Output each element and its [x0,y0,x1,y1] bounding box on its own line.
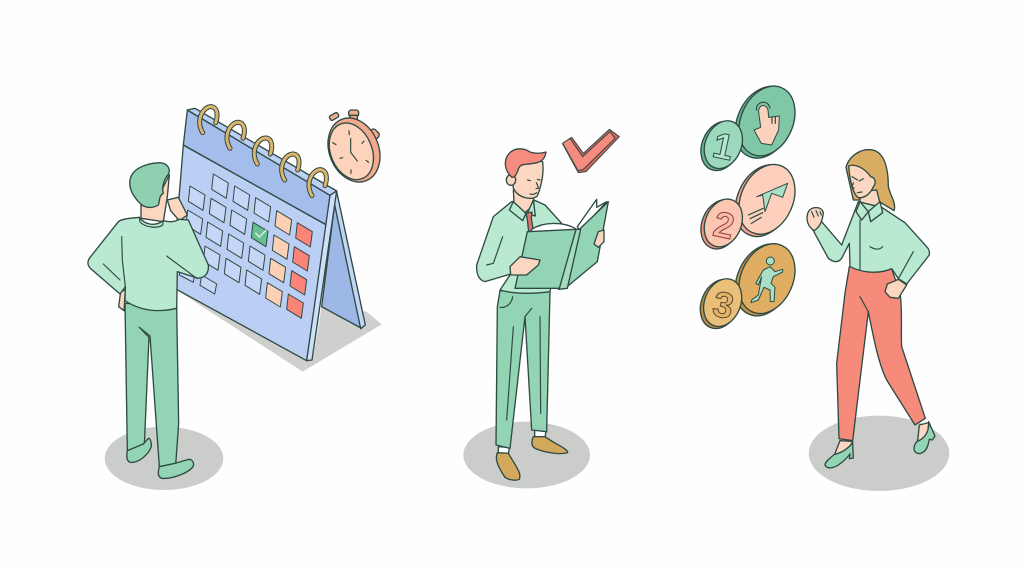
hands [510,257,540,275]
shoes [825,443,853,468]
shirt and arms [813,202,929,284]
sweater [88,217,208,311]
shirt and arm [477,199,562,293]
collar [856,202,883,222]
collar [509,200,535,221]
step 3 coins [693,235,806,334]
man seen from behind [88,163,208,478]
hand at chin [167,197,187,221]
walking woman [807,150,935,468]
desk calendar [172,107,365,361]
socks [498,430,546,454]
small coin number: 2 [710,203,738,247]
step 1 coins [694,77,806,176]
tie [526,212,533,232]
step 2 coins [694,156,806,255]
large coin with paper plane [724,156,806,246]
large coin with pointing hand [724,77,806,167]
open book [515,199,608,289]
neck [860,190,880,212]
hand on hip [119,290,125,311]
figure: man studying a calendar [88,107,389,490]
icon: stopwatch [319,110,389,190]
icon: red check mark [563,129,619,173]
man floor shadow [105,427,223,490]
figure: man reading a book [463,129,619,488]
shoes [127,438,151,462]
feet [834,423,929,456]
small coin number: 3 [709,283,737,327]
figure: woman with numbered step coins [693,77,949,491]
hair [505,149,546,177]
neck [513,190,534,213]
face [512,157,543,198]
floor shadow [463,422,590,488]
spiral binding rings [200,107,326,196]
trousers [496,291,550,448]
head and neck [141,175,169,222]
shoes [496,453,520,480]
face [849,165,875,198]
hair back [846,150,895,211]
trousers [837,267,925,441]
raised fist [807,208,823,231]
trousers [125,303,179,467]
reading man [477,149,608,480]
calendar date cells [179,174,312,318]
hand on hip [885,279,907,298]
small coin number: 1 [709,124,737,168]
large coin with running figure [724,235,806,325]
floor shadow [809,416,949,491]
calendar ground shadow [177,290,382,372]
